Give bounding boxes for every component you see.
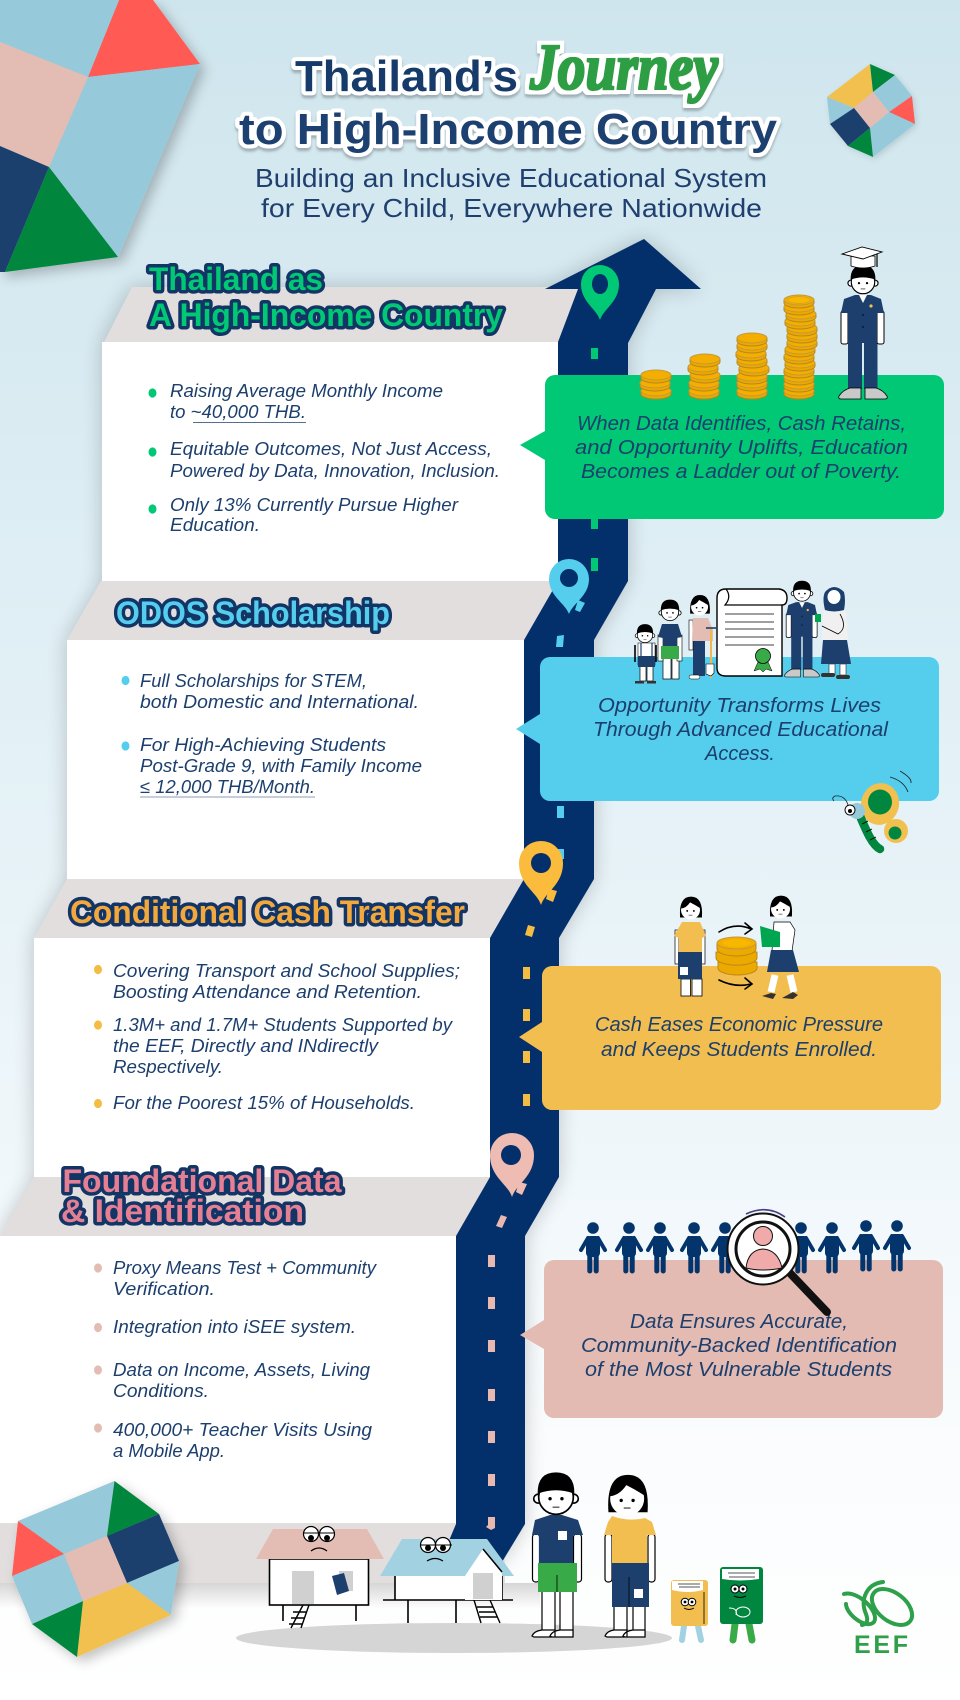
heading: Foundational Data & Identification <box>61 1163 342 1229</box>
icon: rising coin stacks <box>640 295 817 399</box>
subtitle <box>255 163 767 223</box>
text block: foundational data bullets: Conditions. <box>113 1381 209 1401</box>
text block: ODOS bullets: For High-Achieving Students <box>140 735 386 755</box>
icon: large geometric gem top left <box>0 0 200 272</box>
text block: ODOS bullets <box>122 671 422 797</box>
text block: cash transfer bullets: Covering Transport and School Supplies; <box>113 961 460 981</box>
text block: cash transfer bullets: the EEF, Directly and INdirectly <box>113 1036 379 1056</box>
text block: foundational data bullets: Proxy Means Test + Community <box>113 1258 377 1278</box>
staircase and road shadow <box>0 239 701 1562</box>
text block: high-income bullets: Education. <box>170 515 260 535</box>
heading: Thailand as A High-Income Country <box>149 261 503 333</box>
text block: foundational data bullets: 400,000+ Teacher Visits Using <box>113 1420 372 1440</box>
heading: Foundational Data & Identification: Foundational Data <box>62 1163 342 1199</box>
callout: pink data ensures <box>520 1260 943 1418</box>
icon: green book character <box>720 1567 763 1640</box>
icon: girl in yellow shirt <box>604 1475 656 1637</box>
icon: yellow map pin <box>519 841 563 905</box>
logo: EEF: EEF <box>854 1631 908 1659</box>
text block: high-income bullets <box>148 381 500 535</box>
text block: ODOS bullets: ≤ 12,000 THB/Month. <box>140 777 315 797</box>
text block: cash transfer bullets: Boosting Attendance and Retention. <box>113 982 422 1002</box>
heading: Conditional Cash Transfer: Conditional Cash Transfer <box>70 894 465 930</box>
subtitle: for Every Child, Everywhere Nationwide <box>261 193 762 223</box>
callout: yellow cash eases: and Keeps Students Enrolled. <box>601 1039 877 1061</box>
callout: blue opportunity: Access. <box>704 743 775 765</box>
text block: ODOS bullets: Full Scholarships for STEM, <box>140 671 367 691</box>
callout: blue opportunity <box>516 657 939 801</box>
text block: high-income bullets: Equitable Outcomes, Not Just Access, <box>170 439 492 459</box>
text block: foundational data bullets: a Mobile App. <box>113 1441 225 1461</box>
callout: yellow cash eases <box>519 966 941 1110</box>
icon: boy in patched shirt <box>532 1472 583 1637</box>
panel: staircase white panels and grey headers <box>0 287 590 1609</box>
callout: blue opportunity: Opportunity Transforms Lives <box>598 695 881 717</box>
icon: small geometric gem top right <box>827 64 915 157</box>
callout: pink data ensures: of the Most Vulnerable Students <box>585 1359 892 1381</box>
logo: EEF <box>844 1582 919 1659</box>
callout: blue opportunity: Through Advanced Educational <box>593 719 889 741</box>
text block: high-income bullets: Powered by Data, Innovation, Inclusion. <box>170 461 500 481</box>
icon: left house with sad face <box>256 1526 384 1628</box>
text block: cash transfer bullets: Respectively. <box>113 1057 223 1077</box>
title <box>239 31 778 154</box>
icon: bottom-left geometric gem <box>12 1481 179 1657</box>
text block: foundational data bullets: Integration into iSEE system. <box>113 1317 356 1337</box>
icon: right house with sad face <box>380 1538 514 1623</box>
callout: green data identifies: and Opportunity Uplifts, Education <box>575 437 908 459</box>
callout: pink data ensures: Data Ensures Accurate, <box>630 1311 848 1333</box>
heading: Thailand as A High-Income Country: Thailand as <box>149 261 323 297</box>
icon: graduate student <box>839 247 887 399</box>
road with arrow <box>440 239 701 1562</box>
icon: blue map pin <box>549 559 589 614</box>
icon: pink map pin <box>490 1133 534 1197</box>
text block: ODOS bullets: Post-Grade 9, with Family Income <box>140 756 422 776</box>
text block: foundational data bullets: Data on Income, Assets, Living <box>113 1360 370 1380</box>
callout: green data identifies <box>520 375 944 519</box>
text block: cash transfer bullets <box>94 961 460 1113</box>
icon: green map pin <box>581 265 619 320</box>
callout: green data identifies: When Data Identifies, Cash Retains, <box>577 413 906 435</box>
text block: foundational data bullets: Verification. <box>113 1279 215 1299</box>
icon: row of people with magnifier <box>581 1210 909 1312</box>
text block: ODOS bullets: both Domestic and International. <box>140 692 419 712</box>
subtitle: Building an Inclusive Educational System <box>255 163 767 193</box>
text block: foundational data bullets <box>94 1258 377 1461</box>
text block: high-income bullets: Only 13% Currently Pursue Higher <box>170 495 459 515</box>
callout: green data identifies: Becomes a Ladder out of Poverty. <box>581 461 901 483</box>
text block: cash transfer bullets: For the Poorest 15% of Households. <box>113 1093 415 1113</box>
text block: high-income bullets: Raising Average Monthly Income <box>170 381 443 401</box>
title: Thailand’s <box>295 52 518 101</box>
heading: Thailand as A High-Income Country: A High-Income Country <box>149 297 503 333</box>
text block: high-income bullets: to ~40,000 THB. <box>170 402 306 422</box>
text block: cash transfer bullets: 1.3M+ and 1.7M+ Students Supported by <box>113 1015 453 1035</box>
heading: Foundational Data & Identification: & Identification <box>61 1193 304 1229</box>
icon: butterfly <box>833 771 911 849</box>
icon: yellow book character <box>671 1580 708 1640</box>
icon: girl, coins and arrows to schoolgirl <box>674 896 799 999</box>
title: to High-Income Country <box>239 105 778 154</box>
callout: yellow cash eases: Cash Eases Economic Pressure <box>595 1014 883 1036</box>
heading: ODOS Scholarship: ODOS Scholarship <box>116 595 390 631</box>
icon: children and scholarship certificate <box>635 581 851 684</box>
icon: ground shadow <box>236 1623 672 1653</box>
road dashes <box>486 348 598 1530</box>
callout: pink data ensures: Community-Backed Identification <box>581 1335 897 1357</box>
title: Journey <box>529 31 719 104</box>
